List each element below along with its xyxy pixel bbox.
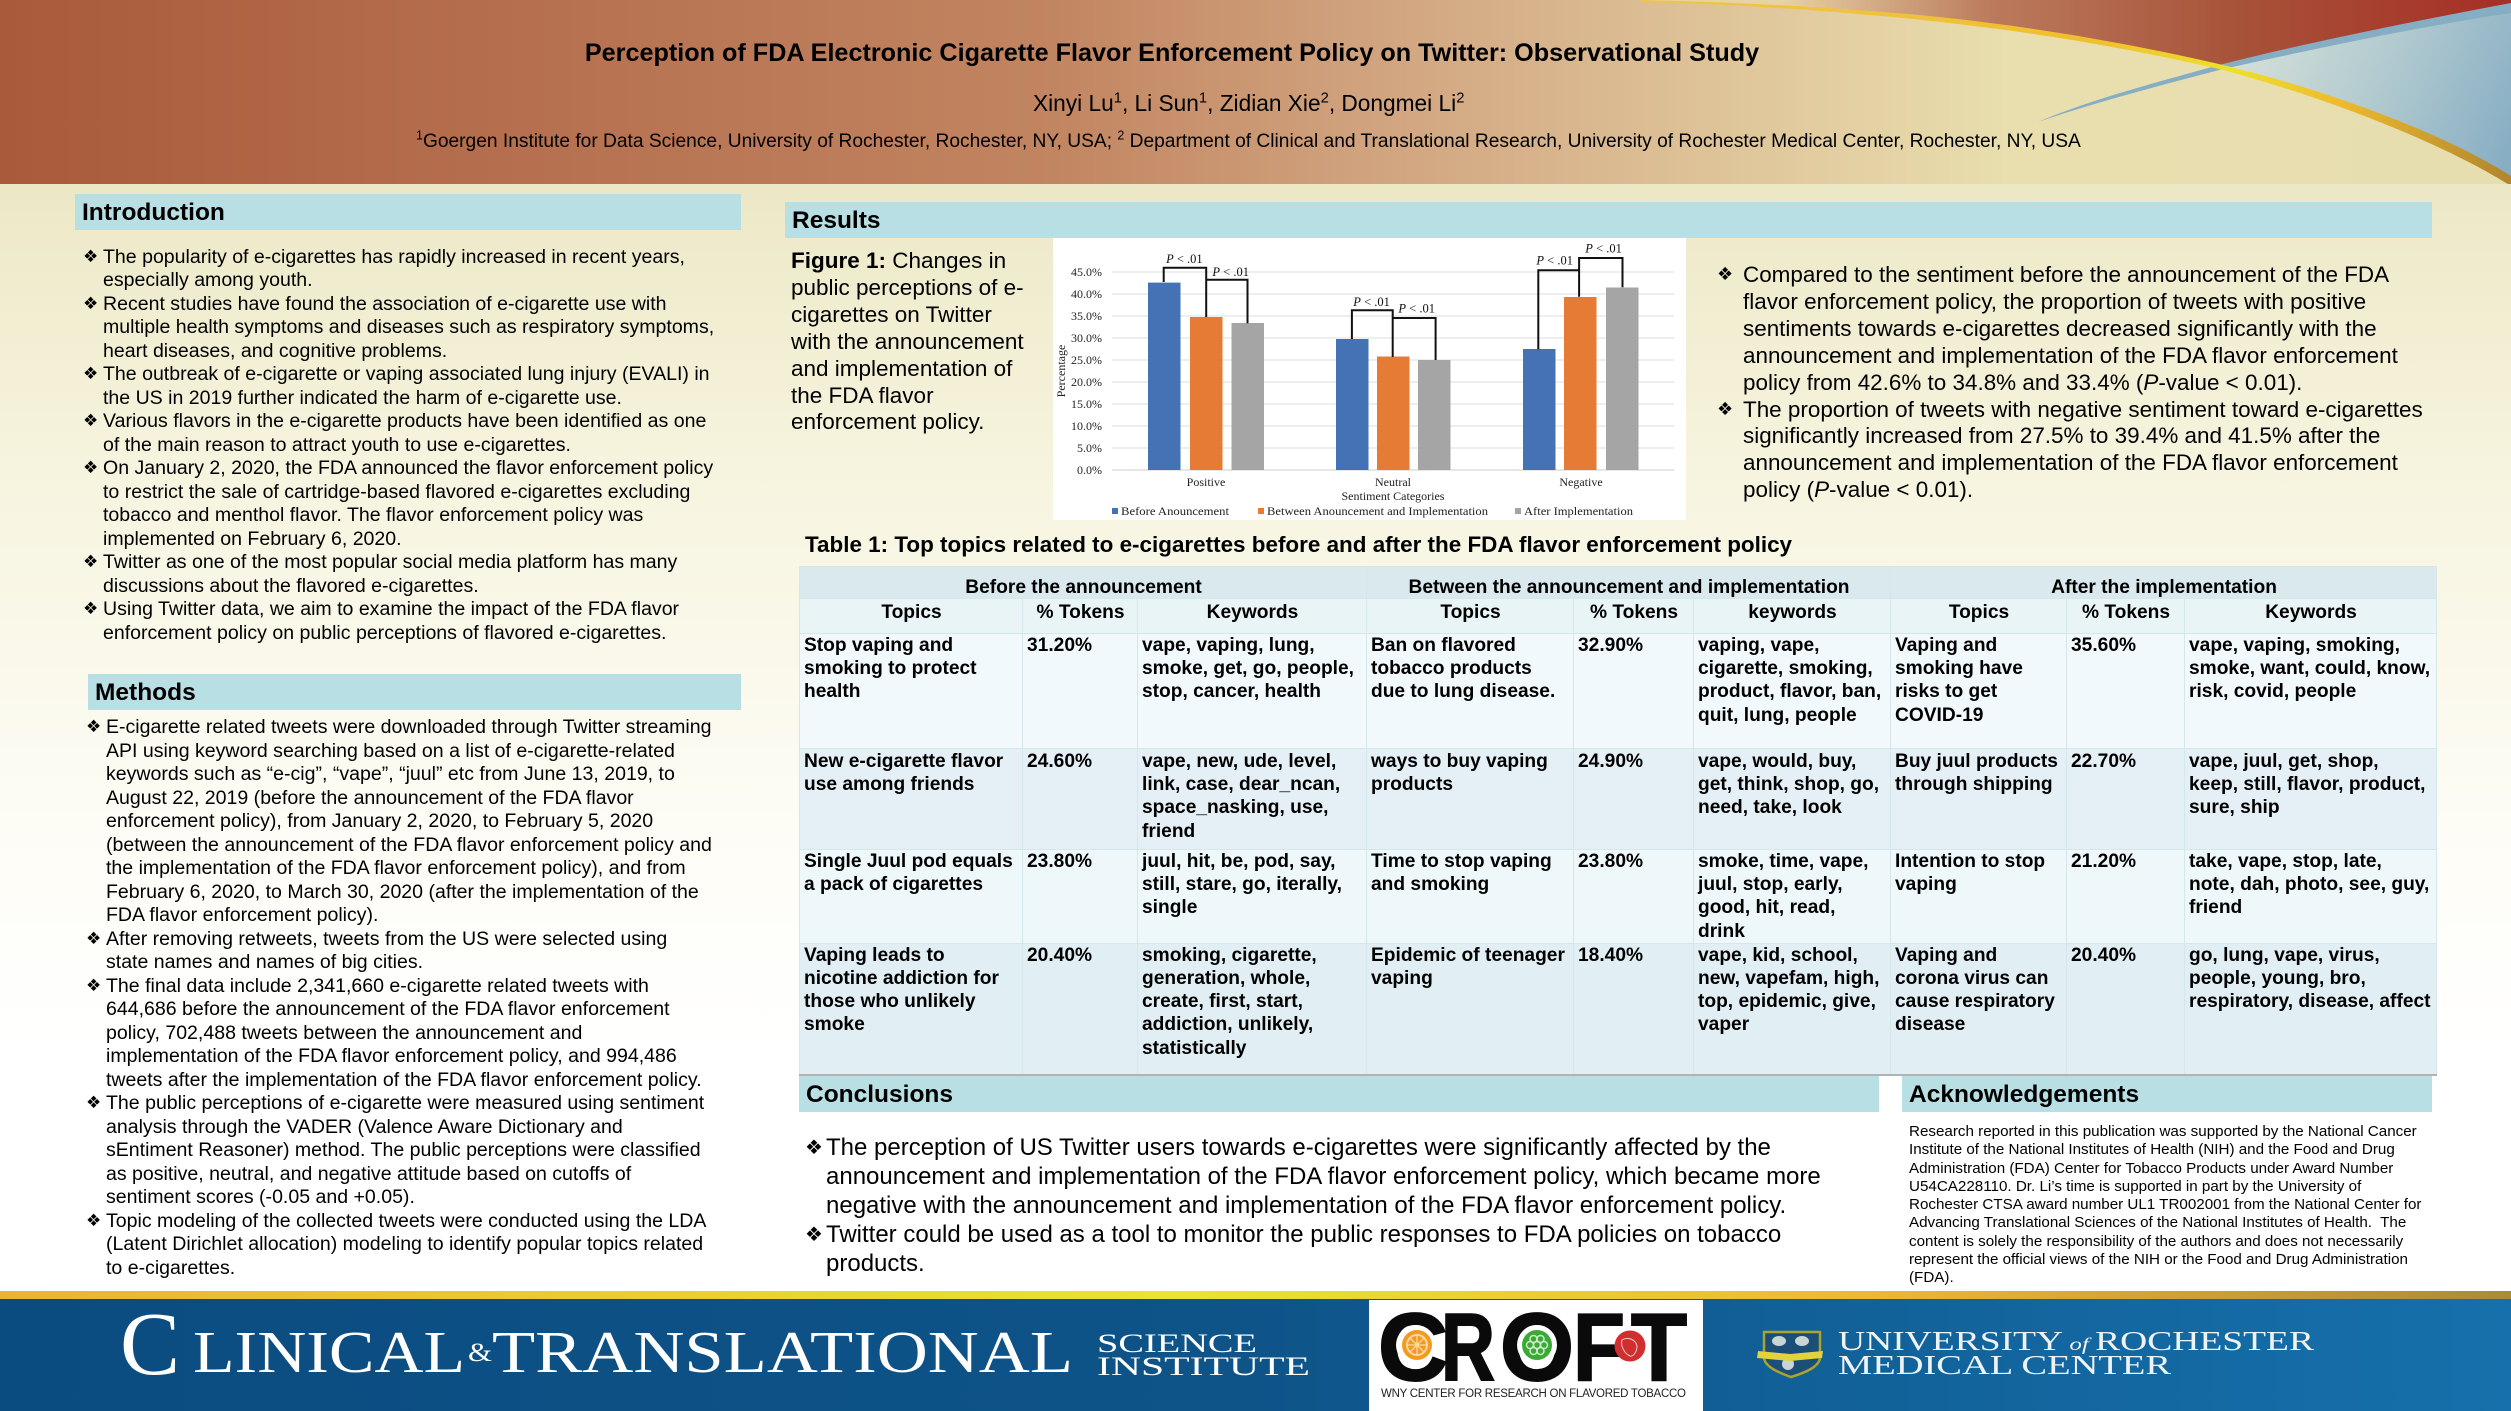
logo: CROFT: T [1631,1294,1687,1401]
results text: sentiments towards e-cigarettes decreased significantly with the [1743,316,2377,341]
figure 1: bar chart: P < .01 [1165,252,1203,266]
logo: University of Rochester Medical Center wordmark [1838,1326,2314,1380]
table 1: nicotine addiction for [804,968,999,989]
affiliations: 1Goergen Institute for Data Science, University of Rochester, Rochester, NY, USA; 2 Department of Clinical and Translational Research, University of Rochester Medical Center, Rochester, NY, USA [416,129,2081,152]
methods text: keywords such as “e-cig”, “vape”, “juul” etc from June 13, 2019, to [106,763,675,785]
text: ❖ [83,458,98,478]
logo: Clinical & Translational Science Institute: SCIENCE [1097,1329,1257,1358]
table 1: Time to stop vaping [1371,851,1552,872]
figure 1: bar chart: 35.0% [1071,309,1102,323]
acknowledgements text: (FDA). [1909,1269,1954,1286]
figure 1: bar chart: 0.0% [1077,463,1102,477]
results text: Compared to the sentiment before the announcement of the FDA [1743,262,2389,287]
table 1: vaper [1698,1014,1749,1035]
introduction text: discussions about the flavored e-cigarettes. [103,574,479,596]
title: Perception of FDA Electronic Cigarette Flavor Enforcement Policy on Twitter: Observational Study [585,39,1759,67]
table 1: Keywords [2265,602,2357,623]
figure 1 caption: public perceptions of e- [791,275,1024,300]
figure 1 caption: the FDA flavor [791,383,934,408]
table 1: statistically [1142,1038,1246,1059]
table 1: stop, cancer, health [1142,681,1321,702]
text: ❖ [805,1135,823,1159]
figure 1: bar chart: 10.0% [1071,419,1102,433]
table 1: due to lung disease. [1371,681,1555,702]
table 1: Between the announcement and implementation [1408,577,1850,598]
table 1: tobacco products [1371,658,1532,679]
results text: policy from 42.6% to 34.8% and 33.4% (P-value < 0.01). [1743,370,2302,395]
table 1: people, young, bro, [2189,968,2366,989]
figure 1: bar chart: 40.0% [1071,287,1102,301]
results text: announcement and implementation of the FDA flavor enforcement [1743,343,2398,368]
methods text: tweets after the implementation of the FDA flavor enforcement policy. [106,1068,702,1090]
methods text: The final data include 2,341,660 e-cigarette related tweets with [106,974,649,996]
table 1: 23.80% [1578,851,1643,872]
table 1: friend [2189,897,2242,918]
text: ❖ [86,976,101,996]
table 1: New e-cigarette flavor [804,751,1003,772]
table 1: 24.60% [1027,751,1092,772]
logo: Clinical & Translational Science Institute: LINICAL [193,1319,465,1385]
table 1: 20.40% [2071,945,2136,966]
table 1: juul, stop, early, [1698,874,1843,895]
figure 1: bar chart: 25.0% [1071,353,1102,367]
table 1: vape, vaping, smoking, [2189,635,2400,656]
table 1: Stop vaping and [804,635,953,656]
figure 1: bar chart: 45.0% [1071,265,1102,279]
methods text: Topic modeling of the collected tweets were conducted using the LDA [106,1210,706,1232]
figure 1 caption: enforcement policy. [791,409,984,434]
table 1: cigarette, smoking, [1698,658,1873,679]
header banner [0,0,2511,184]
figure 1: bar chart: P < .01 [1397,302,1435,316]
table 1: link, case, dear_ncan, [1142,774,1340,795]
figure 1: bar chart: Sentiment Categories [1342,489,1445,503]
table 1: smoke [804,1014,865,1035]
table 1: quit, lung, people [1698,705,1857,726]
results text: flavor enforcement policy, the proportion of tweets with positive [1743,289,2366,314]
table 1: risk, covid, people [2189,681,2356,702]
methods text: to e-cigarettes. [106,1256,235,1278]
figure 1: bar chart: 20.0% [1071,375,1102,389]
introduction text: implemented on February 6, 2020. [103,528,402,550]
introduction text: enforcement policy on public perceptions of flavored e-cigarettes. [103,622,666,644]
figure 1: bar chart: P < .01 [1211,265,1249,279]
acknowledgements text: Administration (FDA) Center for Tobacco Products under Award Number [1909,1160,2393,1176]
figure 1 caption: with the announcement [791,329,1024,354]
table 1: 23.80% [1027,851,1092,872]
authors: Xinyi Lu1, Li Sun1, Zidian Xie2, Dongmei Li2 [1033,90,1464,116]
table 1: create, first, start, [1142,991,1303,1012]
table 1: % Tokens [2082,602,2170,623]
table 1: smoking to protect [804,658,977,679]
methods text: as positive, neutral, and negative attitude based on cutoffs of [106,1162,631,1184]
results heading: Results [792,207,881,234]
logo: Clinical & Translational Science Institute: & [468,1338,492,1367]
table 1: vaping [1895,874,1957,895]
table 1: Buy juul products [1895,751,2058,772]
table 1: vape, would, buy, [1698,751,1856,772]
methods heading: Methods [95,679,196,706]
table 1: juul, hit, be, pod, say, [1142,851,1336,872]
methods text: implementation of the FDA flavor enforcement policy, and 994,486 [106,1045,677,1067]
methods text: state names and names of big cities. [106,951,423,973]
table 1: 18.40% [1578,945,1643,966]
table 1: disease [1895,1014,1965,1035]
figure 1: bar chart: Percentage [1054,345,1068,397]
text: ❖ [86,928,101,948]
acknowledgements text: Institute of the National Institutes of Health (NIH) and the Food and Drug [1909,1141,2395,1158]
methods text: sentiment scores (-0.05 and +0.05). [106,1186,415,1208]
figure 1: bar chart: P < .01 [1535,254,1573,268]
text: ❖ [1717,399,1733,420]
conclusions text: negative with the announcement and implementation of the FDA flavor enforcement policy. [826,1192,1786,1219]
table 1: smoke, want, could, know, [2189,658,2430,679]
acknowledgements text: Advancing Translational Sciences of the National Institutes of Health. The [1909,1214,2406,1231]
table 1: Epidemic of teenager [1371,945,1565,966]
text: ❖ [83,411,98,431]
table 1: Vaping and [1895,945,1997,966]
table 1: and smoking [1371,874,1489,895]
acknowledgements text [1909,1123,2422,1286]
figure 1 caption: and implementation of [791,356,1012,381]
methods text: sEntiment Reasoner) method. The public perceptions were classified [106,1139,701,1161]
figure 1 caption: Figure 1: Changes in [791,248,1006,273]
table 1: generation, whole, [1142,968,1310,989]
acknowledgements text: U54CA228110. Dr. Li’s time is supported in part by the University of [1909,1178,2361,1195]
table 1: vape, juul, get, shop, [2189,751,2379,772]
table 1: corona virus can [1895,968,2048,989]
logo: Clinical & Translational Science Institute: C [120,1295,180,1394]
text: ❖ [805,1222,823,1246]
table 1: drink [1698,921,1745,942]
methods text: 644,686 before the announcement of the FDA flavor enforcement [106,998,670,1020]
figure 1: bar chart: Negative [1559,475,1603,489]
introduction text: to restrict the sale of cartridge-based flavored e-cigarettes excluding [103,480,690,502]
logo: University of Rochester Medical Center wordmark: MEDICAL CENTER [1838,1350,2171,1380]
text: ❖ [83,599,98,619]
table 1: addiction, unlikely, [1142,1014,1313,1035]
figure 1: bar chart: P < .01 [1584,242,1622,256]
logo: Clinical & Translational Science Institute: TRANSLATIONAL [492,1319,1073,1385]
methods text: policy, 702,488 tweets between the announcement and [106,1022,582,1044]
conclusions text: Twitter could be used as a tool to monitor the public responses to FDA policies on tobacco [826,1221,1781,1248]
conclusions heading [799,1076,1879,1112]
methods text: API using keyword searching based on a list of e-cigarette-related [106,740,675,762]
methods text: analysis through the VADER (Valence Aware Dictionary and [106,1116,623,1138]
table 1: smoking have [1895,658,2023,679]
text: ❖ [83,364,98,384]
introduction text: On January 2, 2020, the FDA announced the flavor enforcement policy [103,457,713,479]
table 1: 32.90% [1578,635,1643,656]
methods text [86,716,712,1278]
logo: CROFT: WNY CENTER FOR RESEARCH ON FLAVORED TOBACCO [1381,1388,1686,1400]
text: ❖ [86,1210,101,1230]
figure 1: bar chart: 30.0% [1071,331,1102,345]
table 1: Intention to stop [1895,851,2045,872]
table 1: Vaping leads to [804,945,945,966]
introduction text: Various flavors in the e-cigarette products have been identified as one [103,410,706,432]
introduction text: Twitter as one of the most popular social media platform has many [103,551,677,573]
table 1: note, dah, photo, see, guy, [2189,874,2429,895]
table 1: % Tokens [1590,602,1678,623]
text: ❖ [83,294,98,314]
introduction text: of the main reason to attract youth to use e-cigarettes. [103,434,571,456]
table 1: vape, kid, school, [1698,945,1858,966]
table 1: Vaping and [1895,635,1997,656]
logo: CROFT: R [1441,1294,1495,1401]
table 1: risks to get [1895,681,1997,702]
table 1: Single Juul pod equals [804,851,1013,872]
table 1: single [1142,897,1197,918]
table 1: 35.60% [2071,635,2136,656]
introduction text: The outbreak of e-cigarette or vaping associated lung injury (EVALI) in [103,363,710,385]
results text: policy (P-value < 0.01). [1743,477,1973,502]
introduction heading [75,194,741,230]
table 1: vaping, vape, [1698,635,1819,656]
introduction text [83,246,714,644]
introduction text: multiple health symptoms and diseases such as respiratory symptoms, [103,316,714,338]
table 1: space_nasking, use, [1142,797,1328,818]
introduction text: the US in 2019 further indicated the harm of e-cigarette use. [103,386,622,408]
figure 1: bar chart: Neutral [1375,475,1412,489]
text: ❖ [86,717,101,737]
table 1: smoke, time, vape, [1698,851,1868,872]
table 1: vape, vaping, lung, [1142,635,1315,656]
table 1: need, take, look [1698,797,1842,818]
table 1: Before the announcement [965,577,1202,598]
acknowledgements text: Rochester CTSA award number UL1 TR002001 from the National Center for [1909,1196,2421,1213]
methods text: February 6, 2020, to March 30, 2020 (after the implementation of the [106,880,699,902]
table 1: good, hit, read, [1698,897,1835,918]
table 1: COVID-19 [1895,705,1983,726]
text: ❖ [1717,264,1733,285]
figure 1 caption: cigarettes on Twitter [791,302,992,327]
methods heading [88,674,741,710]
table 1: 21.20% [2071,851,2136,872]
table 1: keywords [1748,602,1837,623]
introduction text: Recent studies have found the association of e-cigarette use with [103,292,666,314]
figure 1: bar chart: P < .01 [1352,295,1390,309]
text: ❖ [86,1093,101,1113]
table 1: still, stare, go, iterally, [1142,874,1342,895]
introduction text: especially among youth. [103,269,313,291]
table 1: smoking, cigarette, [1142,945,1317,966]
conclusions text: products. [826,1250,925,1277]
table 1: Topics [881,602,942,623]
results text: significantly increased from 27.5% to 39.4% and 41.5% after the [1743,423,2380,448]
table 1: Keywords [1207,602,1298,623]
table 1: go, lung, vape, virus, [2189,945,2380,966]
figure 1: bar chart: 5.0% [1077,441,1102,455]
table 1: get, think, shop, go, [1698,774,1879,795]
methods text: August 22, 2019 (before the announcement of the FDA flavor [106,786,634,808]
table 1: new, vapefam, high, [1698,968,1879,989]
table 1: % Tokens [1036,602,1125,623]
results text [1717,262,2423,502]
table 1: health [804,681,860,702]
introduction heading: Introduction [82,199,225,226]
logo: Clinical & Translational Science Institute [120,1295,1310,1394]
logo: CROFT: F [1573,1294,1625,1401]
table 1: vaping [1371,968,1433,989]
conclusions text [805,1134,1821,1277]
acknowledgements heading: Acknowledgements [1909,1081,2139,1108]
figure 1: bar chart: 15.0% [1071,397,1102,411]
figure 1: bar chart: Positive [1187,475,1225,489]
table 1: sure, ship [2189,797,2280,818]
table 1: keep, still, flavor, product, [2189,774,2426,795]
logo: University of Rochester Medical Center crest [1757,1332,1823,1377]
conclusions text: announcement and implementation of the FDA flavor enforcement policy, which became more [826,1163,1821,1190]
figure 1: bar chart: Before Anouncement [1121,504,1230,518]
table 1: respiratory, disease, affect [2189,991,2431,1012]
methods text: the implementation of the FDA flavor enforcement policy), and from [106,857,686,879]
table 1: product, flavor, ban, [1698,681,1881,702]
logo: University of Rochester Medical Center wordmark: UNIVERSITY of ROCHESTER [1838,1326,2314,1356]
logo: CROFT [1369,1294,1703,1411]
table 1: 22.70% [2071,751,2136,772]
footer band with logos [0,1291,2511,1411]
text: ❖ [83,552,98,572]
table 1: 24.90% [1578,751,1643,772]
table 1: products [1371,774,1453,795]
logo: CROFT: O [1500,1294,1574,1401]
figure 1: bar chart: After Implementation [1524,504,1633,518]
methods text: The public perceptions of e-cigarette were measured using sentiment [106,1092,704,1114]
logo: Clinical & Translational Science Institute: INSTITUTE [1097,1352,1310,1381]
introduction text: heart diseases, and cognitive problems. [103,340,447,362]
methods text: After removing retweets, tweets from the US were selected using [106,928,667,950]
figure 1 caption [791,248,1024,434]
table 1: After the implementation [2051,577,2277,598]
figure 1: bar chart: Between Anouncement and Implementation [1267,504,1488,518]
acknowledgements text: represent the official views of the NIH or the Food and Drug Administration [1909,1251,2408,1268]
table 1: cause respiratory [1895,991,2055,1012]
methods text: enforcement policy), from January 2, 2020, to February 5, 2020 [106,810,653,832]
table 1: ways to buy vaping [1371,751,1548,772]
results heading [785,202,2432,238]
table 1 [799,566,2437,1076]
table 1: 20.40% [1027,945,1092,966]
table 1: friend [1142,821,1195,842]
acknowledgements text: content is solely the responsibility of the authors and does not necessarily [1909,1232,2403,1250]
table 1: vape, new, ude, level, [1142,751,1336,772]
conclusions text: The perception of US Twitter users towards e-cigarettes were significantly affected by the [826,1134,1771,1161]
introduction text: Using Twitter data, we aim to examine the impact of the FDA flavor [103,598,679,620]
table 1: use among friends [804,774,974,795]
methods text: (between the announcement of the FDA flavor enforcement policy and [106,834,712,856]
methods text: FDA flavor enforcement policy). [106,904,378,926]
introduction text: tobacco and menthol flavor. The flavor enforcement policy was [103,504,643,526]
table 1 title: Table 1: Top topics related to e-cigarettes before and after the FDA flavor enforcement policy [805,532,1792,557]
table 1: Topics [1949,602,2009,623]
acknowledgements heading [1902,1076,2432,1112]
results text: announcement and implementation of the FDA flavor enforcement [1743,450,2398,475]
introduction text: The popularity of e-cigarettes has rapidly increased in recent years, [103,246,685,268]
text: ❖ [83,246,98,266]
methods text: E-cigarette related tweets were downloaded through Twitter streaming [106,716,711,738]
table 1: 31.20% [1027,635,1092,656]
conclusions heading: Conclusions [806,1081,953,1108]
table 1: a pack of cigarettes [804,874,983,895]
table 1: take, vape, stop, late, [2189,851,2382,872]
logo: CROFT: C [1378,1294,1448,1401]
acknowledgements text: Research reported in this publication was supported by the National Cancer [1909,1123,2417,1140]
table 1: Ban on flavored [1371,635,1516,656]
table 1: those who unlikely [804,991,976,1012]
methods text: (Latent Dirichlet allocation) modeling to identify popular topics related [106,1233,703,1255]
table 1: smoke, get, go, people, [1142,658,1354,679]
table 1: top, epidemic, give, [1698,991,1876,1012]
table 1: Topics [1440,602,1501,623]
table 1: through shipping [1895,774,2053,795]
figure 1: bar chart [1053,238,1686,520]
results text: The proportion of tweets with negative sentiment toward e-cigarettes [1743,397,2423,422]
